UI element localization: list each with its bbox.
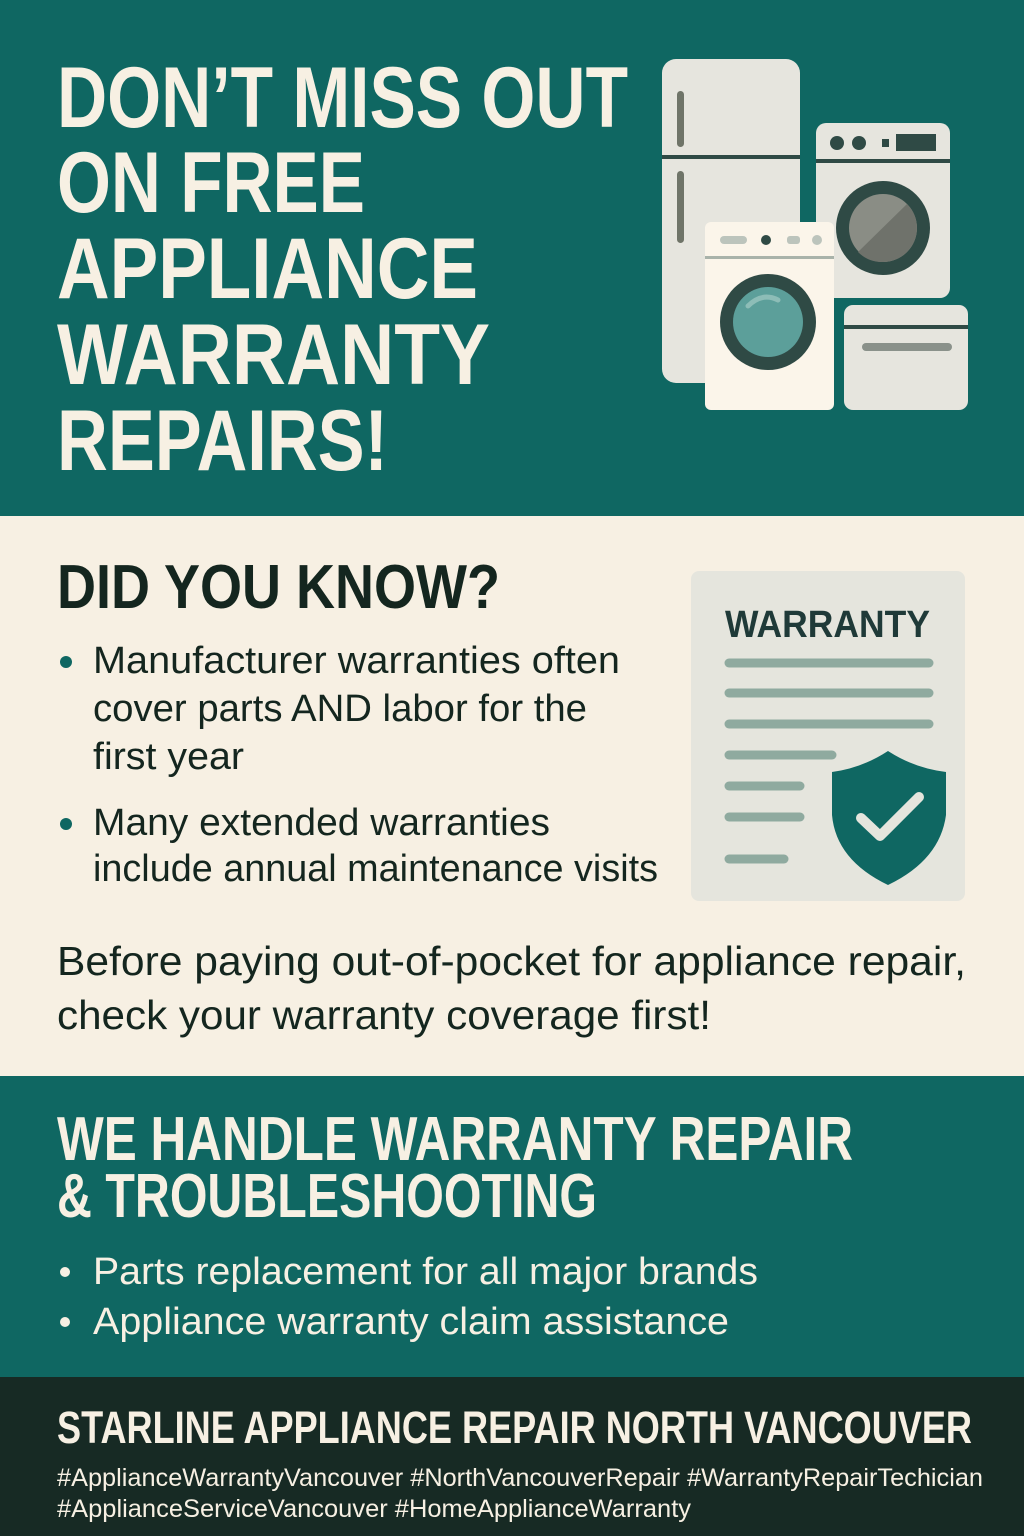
bullet list: services: Parts replacement for all major brands (93, 1251, 758, 1293)
title: REPAIRS! (57, 393, 388, 489)
hashtags (57, 1464, 983, 1523)
title (57, 50, 628, 489)
icon: warranty document: WARRANTY (725, 604, 930, 646)
text block: advice: check your warranty coverage first! (57, 992, 711, 1038)
bullet list: facts: Manufacturer warranties often (93, 640, 620, 682)
bullet list: services (60, 1251, 758, 1343)
heading: services: & TROUBLESHOOTING (57, 1162, 597, 1231)
icon: dishwasher (844, 305, 968, 410)
heading: services: WE HANDLE WARRANTY REPAIR (57, 1105, 853, 1174)
hashtags: #ApplianceWarrantyVancouver #NorthVancouverRepair #WarrantyRepairTechician (57, 1464, 983, 1492)
bullet list: facts: Many extended warranties (93, 802, 550, 844)
bullet list: services: Appliance warranty claim assistance (93, 1301, 729, 1343)
heading: services (57, 1105, 853, 1231)
icon: washer (705, 222, 834, 410)
icon: fridge (662, 59, 800, 383)
hashtags: #ApplianceServiceVancouver #HomeApplianceWarranty (57, 1495, 692, 1523)
icon: appliances (662, 59, 968, 410)
panel: footer (0, 1377, 1024, 1536)
title: ON FREE (57, 135, 365, 231)
icon: shield check (832, 751, 946, 885)
title: APPLIANCE (57, 221, 478, 317)
bullet list: facts: cover parts AND labor for the (93, 688, 587, 730)
panel: did you know (0, 516, 1024, 1076)
panel: services (0, 1076, 1024, 1377)
title: WARRANTY (57, 307, 490, 403)
bullet list: facts: first year (93, 736, 244, 778)
heading: did you know: DID YOU KNOW? (57, 553, 500, 622)
bullet list: facts (60, 640, 658, 890)
panel: header (0, 0, 1024, 516)
title: DON’T MISS OUT (57, 50, 628, 146)
icon: warranty document (691, 571, 965, 901)
text block: advice (57, 938, 966, 1038)
text block: advice: Before paying out-of-pocket for appliance repair, (57, 938, 966, 984)
icon: dryer (816, 123, 950, 298)
bullet list: facts: include annual maintenance visits (93, 848, 658, 890)
